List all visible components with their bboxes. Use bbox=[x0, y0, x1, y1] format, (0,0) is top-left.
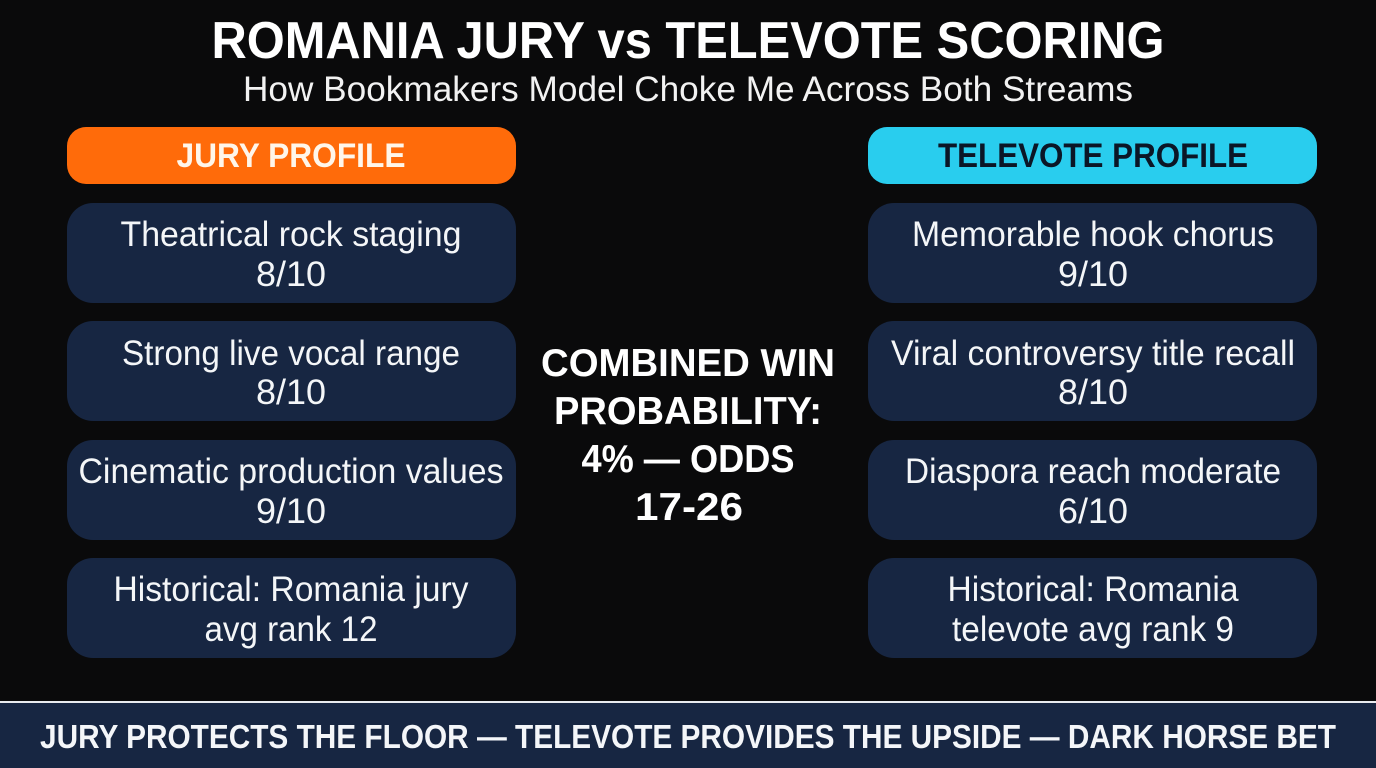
jury card: historical rank bbox=[67, 558, 516, 658]
jury header bbox=[67, 127, 516, 184]
jury card: cinematic production values: 9/10 bbox=[256, 492, 326, 531]
televote card: diaspora reach moderate bbox=[868, 440, 1317, 540]
jury card: cinematic production values: Cinematic production values bbox=[78, 452, 504, 491]
jury header: JURY PROFILE bbox=[176, 137, 406, 175]
televote card: viral controversy title recall bbox=[868, 321, 1317, 421]
televote card: diaspora reach moderate: 6/10 bbox=[1058, 492, 1128, 531]
televote card: historical rank: televote avg rank 9 bbox=[952, 610, 1234, 649]
jury card: strong live vocal range: Strong live vocal range bbox=[122, 334, 460, 373]
televote card: diaspora reach moderate: Diaspora reach moderate bbox=[905, 452, 1281, 491]
panel: jury profile bbox=[67, 127, 516, 658]
televote card: memorable hook chorus bbox=[868, 203, 1317, 303]
televote card: viral controversy title recall: 8/10 bbox=[1058, 373, 1128, 412]
subtitle: How Bookmakers Model Choke Me Across Both Streams bbox=[243, 70, 1133, 109]
center callout: combined win probability: PROBABILITY: bbox=[554, 390, 822, 433]
jury card: strong live vocal range: 8/10 bbox=[256, 373, 326, 412]
televote card: memorable hook chorus: Memorable hook chorus bbox=[912, 215, 1274, 254]
center callout: combined win probability: 17-26 bbox=[635, 486, 743, 529]
jury card: theatrical rock staging: 8/10 bbox=[256, 255, 326, 294]
televote card: historical rank bbox=[868, 558, 1317, 658]
jury card: cinematic production values bbox=[67, 440, 516, 540]
televote header bbox=[868, 127, 1317, 184]
jury card: theatrical rock staging bbox=[67, 203, 516, 303]
center callout: combined win probability bbox=[541, 342, 835, 529]
televote card: viral controversy title recall: Viral controversy title recall bbox=[891, 334, 1295, 373]
panel: televote profile bbox=[868, 127, 1317, 658]
jury card: historical rank: avg rank 12 bbox=[204, 610, 378, 649]
televote card: memorable hook chorus: 9/10 bbox=[1058, 255, 1128, 294]
footer banner bbox=[0, 701, 1376, 768]
televote header: TELEVOTE PROFILE bbox=[938, 137, 1248, 175]
center callout: combined win probability: COMBINED WIN bbox=[541, 342, 835, 385]
jury card: theatrical rock staging: Theatrical rock staging bbox=[120, 215, 462, 254]
jury card: historical rank: Historical: Romania jury bbox=[114, 570, 469, 609]
televote card: historical rank: Historical: Romania bbox=[948, 570, 1239, 609]
jury card: strong live vocal range bbox=[67, 321, 516, 421]
title: ROMANIA JURY vs TELEVOTE SCORING bbox=[212, 12, 1164, 70]
center callout: combined win probability: 4% — ODDS bbox=[582, 438, 794, 481]
